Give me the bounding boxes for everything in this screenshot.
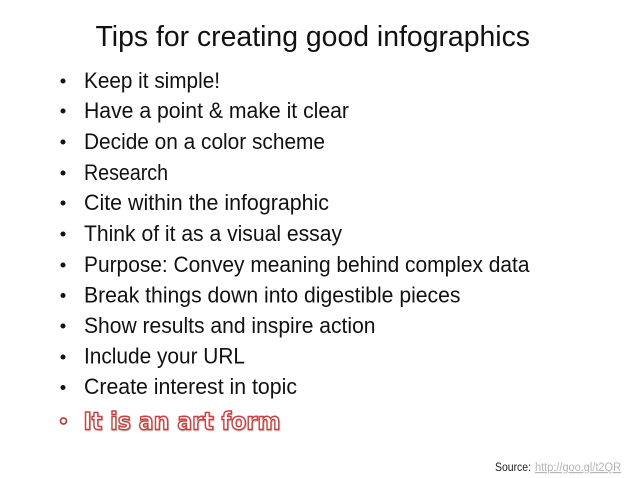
bullet 9: Show results and inspire action: [84, 313, 376, 338]
source citation: [495, 462, 621, 474]
bullet 3: Decide on a color scheme: [84, 129, 325, 154]
bullet list: [60, 68, 530, 399]
highlighted bullet: art form: It is an art form: [84, 408, 280, 436]
bullet 1: Keep it simple!: [84, 68, 220, 93]
bullet 7: Purpose: Convey meaning behind complex data: [84, 252, 530, 277]
bullet 4: Research: [84, 160, 168, 185]
title: Tips for creating good infographics: [96, 21, 530, 53]
bullet 5: Cite within the infographic: [84, 190, 329, 215]
bullet 2: Have a point & make it clear: [84, 98, 349, 123]
bullet 10: Include your URL: [84, 344, 245, 368]
bullet 6: Think of it as a visual essay: [84, 221, 343, 246]
bullet 8: Break things down into digestible pieces: [84, 282, 460, 308]
source citation: Source:: [495, 462, 531, 474]
source citation: http://goo.gl/t2QR: [535, 462, 621, 474]
bullet 11: Create interest in topic: [84, 374, 297, 399]
